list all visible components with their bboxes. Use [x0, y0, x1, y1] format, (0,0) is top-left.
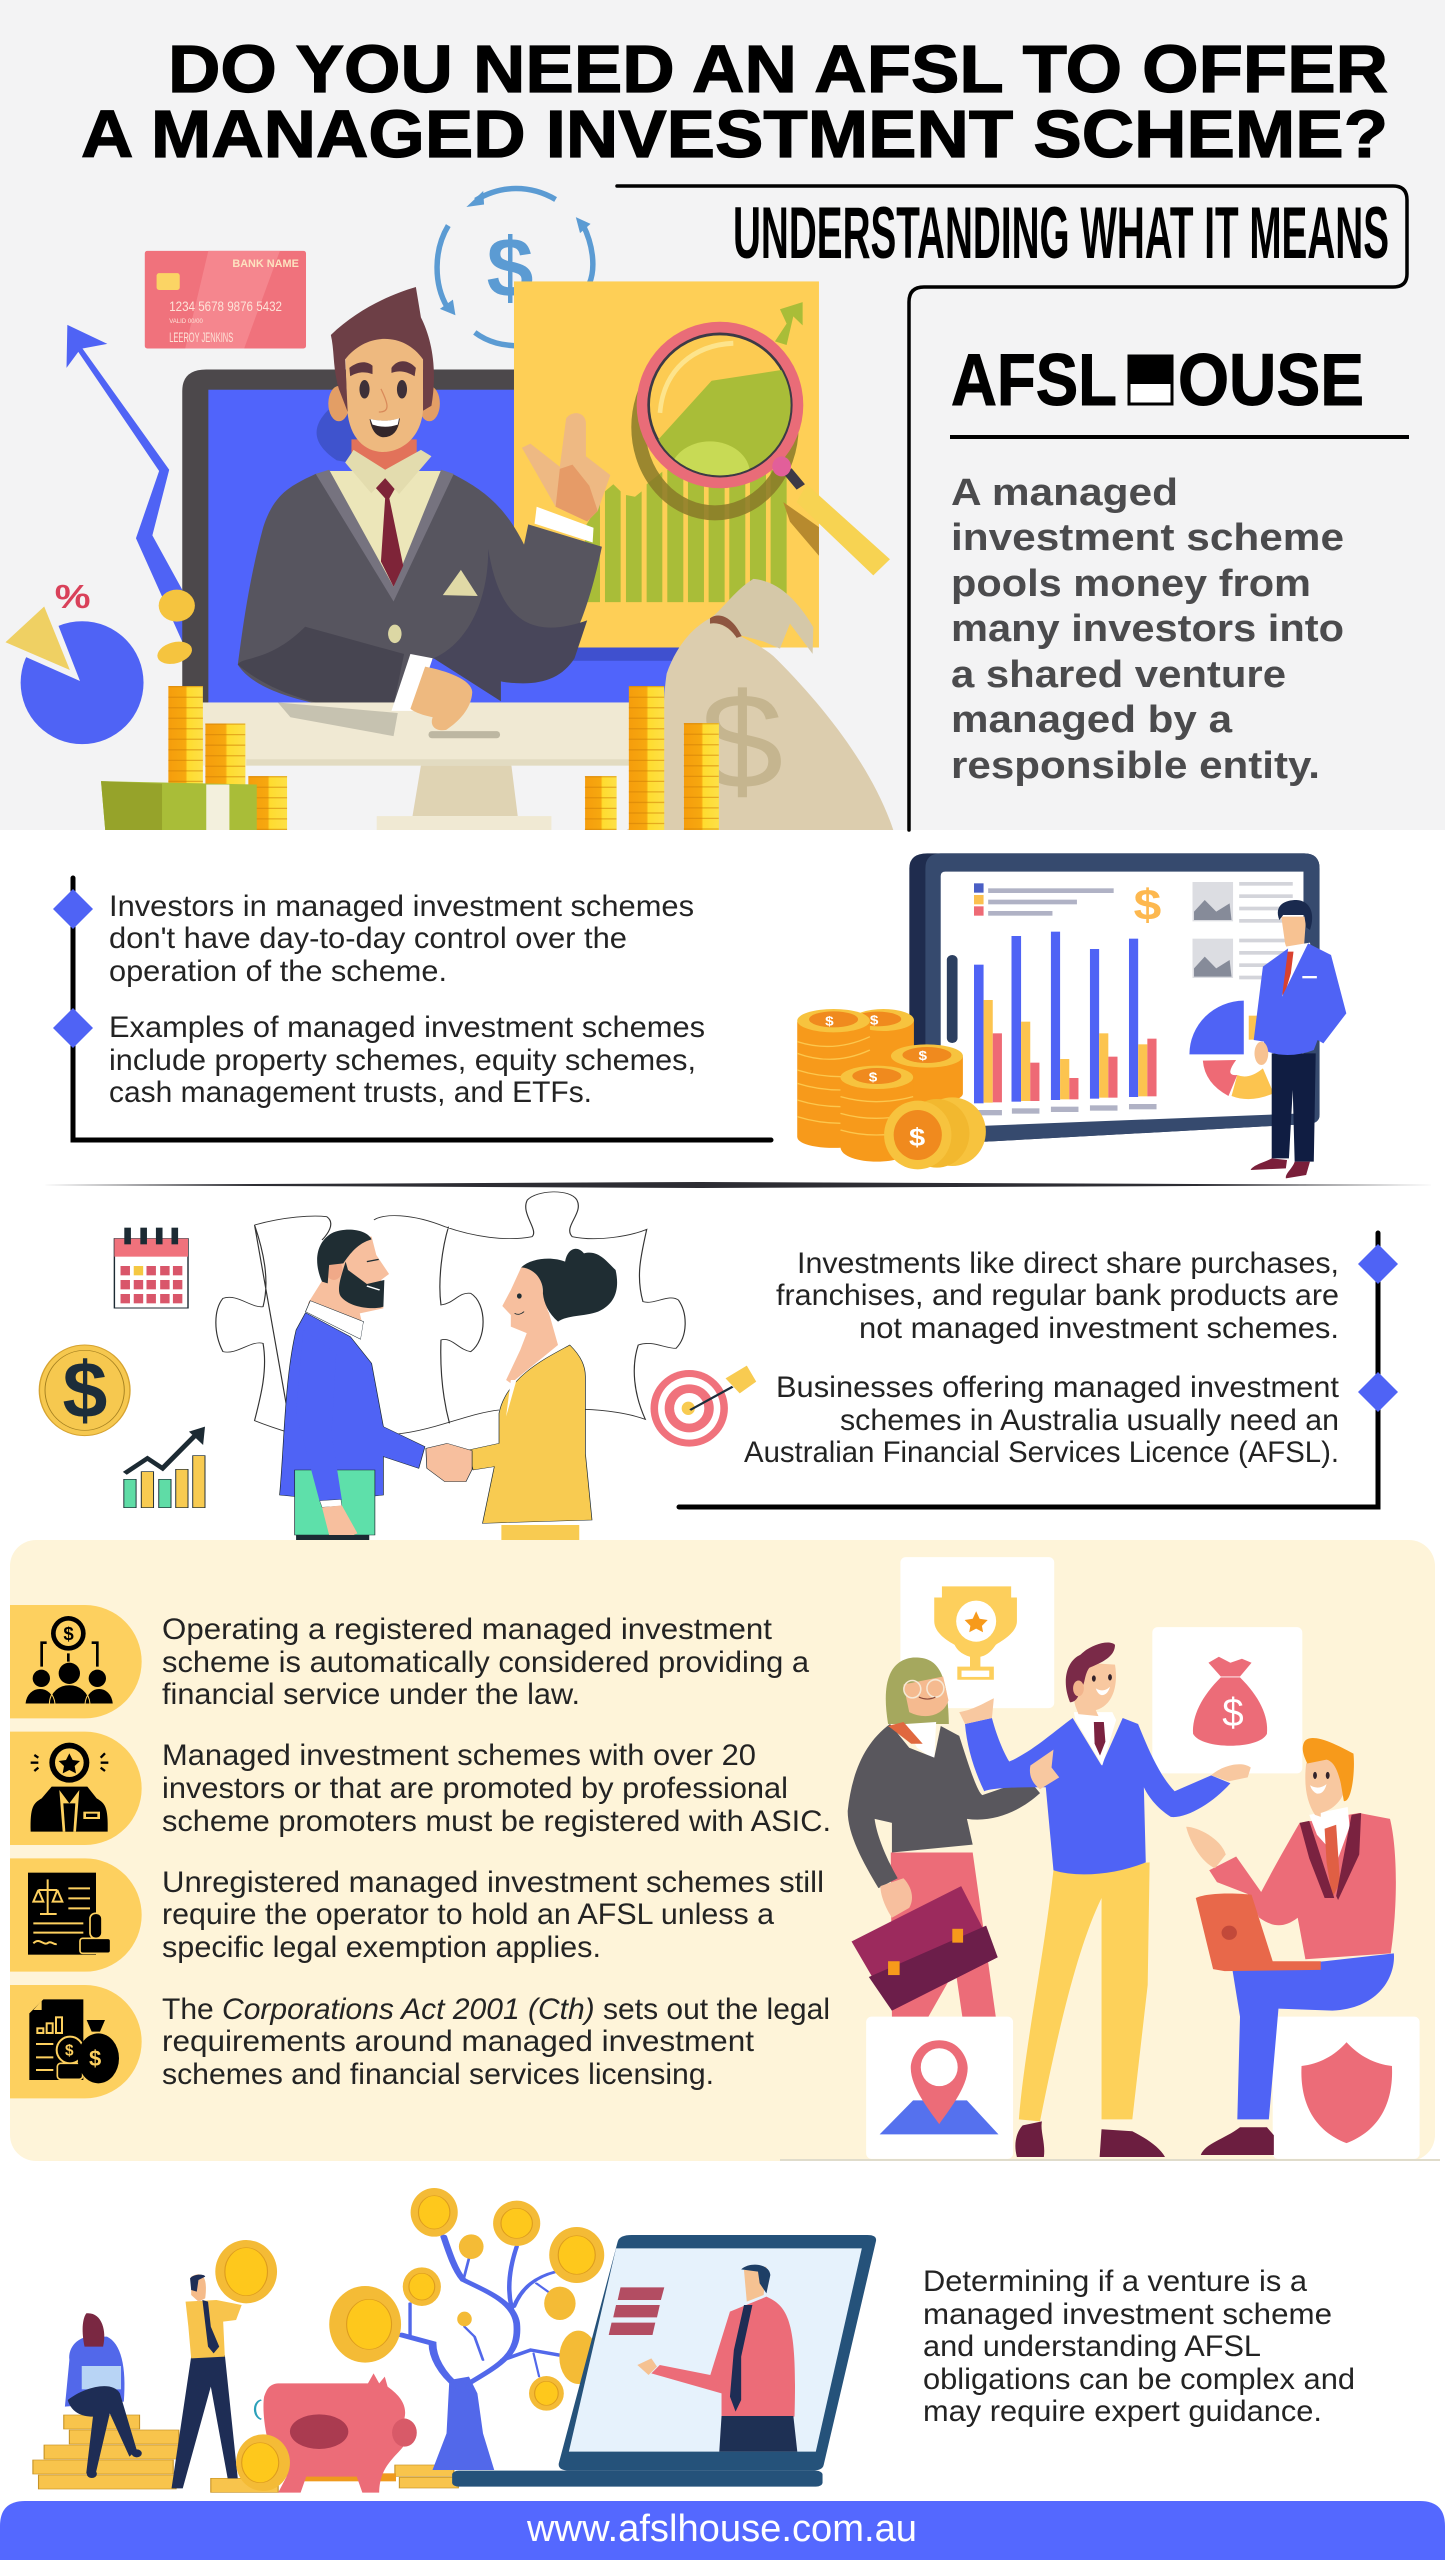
text: not MIS: not managed investment schemes.	[859, 1312, 1339, 1345]
monitor	[182, 370, 716, 717]
divider	[42, 1182, 1435, 1188]
coin stacks	[797, 1009, 986, 1169]
coin stacks: $	[870, 1013, 878, 1028]
coin stacks: $	[919, 1049, 927, 1064]
icon: bullet diamond	[53, 889, 93, 929]
text: investors	[109, 890, 694, 988]
text: examples: include property schemes, equity schemes,	[109, 1044, 696, 1077]
gold stack	[33, 2415, 458, 2492]
text: examples	[109, 1011, 705, 1109]
text: registration: scheme promoters must be registered with ASIC.	[162, 1805, 831, 1838]
intro paragraph: responsible entity.	[951, 745, 1320, 787]
text: unregistered: specific legal exemption applies.	[162, 1931, 601, 1964]
panel bottom line	[780, 2159, 1440, 2161]
tablet	[909, 853, 1320, 1142]
text: operating: financial service under the law.	[162, 1678, 580, 1711]
icon: credit card: BANK NAME	[232, 258, 299, 270]
icon: credit card: VALID 00/00	[169, 318, 203, 325]
intro paragraph: pools money from	[951, 563, 1311, 605]
coin stacks: $	[909, 1122, 925, 1151]
icon: bullet diamond	[1358, 1372, 1398, 1412]
card: money bag: $	[1222, 1691, 1244, 1735]
illustration: handshake with puzzle	[39, 1192, 756, 1541]
icon: pie chart	[5, 579, 144, 744]
illustration: dashboard tablet, coins and businessman	[797, 853, 1346, 1178]
icon: dollar cycle arrows: $	[487, 220, 533, 314]
text: corporations act	[162, 1993, 830, 2091]
text: AFSL needed: Businesses offering managed investment	[776, 1371, 1340, 1404]
icon group: licensing badges	[10, 1605, 142, 2098]
hero illustration: presenter at monitor	[5, 189, 716, 744]
legend	[974, 883, 1114, 916]
intro paragraph: A managed	[951, 472, 1178, 514]
text: registration: Managed investment schemes with over 20	[162, 1739, 756, 1772]
footer url: www.afslhouse.com.au	[526, 2508, 917, 2550]
icon: bullet diamond	[53, 1008, 93, 1048]
piggy bank	[236, 2373, 417, 2493]
text: investors: operation of the scheme.	[109, 955, 447, 988]
chart panel with magnifier	[514, 281, 890, 647]
icon: pie chart: %	[55, 579, 91, 616]
raised hand and cuff	[522, 413, 610, 543]
text: not MIS: Investments like direct share purchases,	[797, 1247, 1339, 1280]
woman	[468, 1249, 617, 1541]
icon: calendar	[114, 1228, 188, 1308]
text: operating	[162, 1613, 809, 1711]
icon: dollar coin	[39, 1345, 130, 1436]
desk	[202, 702, 682, 830]
text: not MIS	[776, 1247, 1339, 1345]
panel: licensing section	[10, 1540, 1435, 2161]
bar chart	[974, 932, 1157, 1115]
text: registration: investors or that are promoted by professional	[162, 1772, 788, 1805]
text: unregistered: require the operator to hold an AFSL unless a	[162, 1898, 774, 1931]
illustration: money tree and online adviser	[33, 2188, 876, 2493]
businessman	[1251, 900, 1346, 1178]
text: AFSL needed: Australian Financial Services Licence (AFSL).	[744, 1436, 1339, 1469]
suit	[238, 450, 602, 715]
intro paragraph: a shared venture	[951, 654, 1286, 696]
text: operating: Operating a registered managed investment	[162, 1613, 773, 1646]
background: white lower sections	[0, 830, 1445, 2560]
card: trophy	[900, 1557, 1054, 1708]
panel: business text	[679, 1233, 1398, 1507]
footer bar	[0, 2501, 1445, 2560]
icon: target with arrow	[651, 1366, 756, 1447]
text: not MIS: franchises, and regular bank products are	[776, 1279, 1339, 1312]
text: unregistered: Unregistered managed investment schemes still	[162, 1866, 824, 1899]
illustration: team of three with icon cards	[848, 1557, 1420, 2159]
man in pink jacket with laptop	[1186, 1738, 1396, 2155]
icon: dollar: $	[1134, 881, 1161, 929]
panel: investors bullets	[53, 878, 771, 1140]
icon: dollar cycle arrows	[437, 189, 593, 346]
standing man with coin	[172, 2240, 277, 2488]
title	[81, 32, 1388, 172]
card: map pin	[866, 2017, 1013, 2159]
woman with briefcase	[848, 1658, 1040, 2017]
text: AFSL needed: schemes in Australia usually need an	[840, 1404, 1339, 1437]
card: shield	[1273, 2017, 1420, 2159]
text: operating: scheme is automatically considered providing a	[162, 1646, 809, 1679]
text: closing note: may require expert guidance.	[923, 2395, 1322, 2428]
icon: bullet diamond	[1358, 1244, 1398, 1284]
text: examples: cash management trusts, and ETFs.	[109, 1076, 592, 1109]
neck shadow and ears	[328, 386, 440, 475]
puzzle outline	[216, 1192, 685, 1434]
text: closing note: managed investment scheme	[923, 2298, 1332, 2331]
text: examples: Examples of managed investment schemes	[109, 1011, 705, 1044]
falling coins	[155, 590, 195, 668]
coin stacks: $	[825, 1015, 834, 1029]
text: registration	[162, 1739, 831, 1838]
seated woman	[65, 2313, 142, 2478]
intro paragraph: managed by a	[951, 699, 1233, 741]
subtitle box frame	[617, 186, 1407, 830]
icon: credit card	[145, 251, 306, 348]
text: investors: don't have day-to-day control over the	[109, 922, 627, 955]
thumbnails	[1192, 882, 1293, 979]
text: corporations act: The Corporations Act 2001 (Cth) sets out the legal	[162, 1993, 830, 2026]
bar chart	[585, 470, 787, 602]
badge: report and money: $	[89, 2046, 101, 2071]
text: corporations act: requirements around managed investment	[162, 2025, 755, 2058]
coin stacks and banknotes	[101, 686, 719, 830]
logo: AFSL House: AFSL	[951, 340, 1117, 421]
badge: investor group: $	[63, 1623, 74, 1644]
icon: growth chart	[124, 1427, 205, 1508]
logo: AFSL House: OUSE	[1178, 340, 1364, 421]
lower hand and cuff	[391, 654, 472, 730]
handshake	[426, 1443, 472, 1482]
icon: dollar coin: $	[62, 1345, 107, 1435]
text block: licensing points	[162, 1613, 831, 2091]
text: closing note: obligations can be complex and	[923, 2363, 1355, 2396]
icon: rising arrow	[67, 325, 185, 644]
frame line	[679, 1233, 1378, 1507]
title: A MANAGED INVESTMENT SCHEME?	[81, 97, 1388, 172]
badge: investor group	[10, 1605, 142, 1718]
text: AFSL needed	[744, 1371, 1340, 1469]
coin stacks: $	[869, 1070, 877, 1085]
text: unregistered	[162, 1866, 824, 1964]
icon: credit card: LEEROY JENKINS	[169, 330, 233, 345]
frame line	[73, 878, 771, 1140]
badge: report and money: $	[65, 2043, 74, 2060]
head	[331, 287, 434, 452]
magnifier	[637, 302, 890, 575]
logo rule	[950, 435, 1409, 439]
intro paragraph	[951, 472, 1344, 787]
text: investors: Investors in managed investment schemes	[109, 890, 694, 923]
badge: report and money	[10, 1985, 142, 2098]
presenter	[155, 287, 682, 830]
intro paragraph: many investors into	[951, 608, 1344, 650]
icon: credit card: 1234 5678 9876 5432	[169, 299, 282, 314]
logo: AFSL House	[951, 340, 1364, 421]
title: DO YOU NEED AN AFSL TO OFFER	[168, 32, 1388, 107]
man	[280, 1230, 425, 1541]
tree	[402, 2237, 559, 2470]
intro paragraph: investment scheme	[951, 517, 1344, 559]
badge: promoter	[10, 1732, 142, 1845]
money bag: $	[700, 665, 783, 817]
donut chart	[1189, 1001, 1274, 1099]
money bag	[627, 579, 893, 830]
card: money bag	[1152, 1627, 1302, 1773]
text: closing note: Determining if a venture is a	[923, 2265, 1307, 2298]
text: corporations act: schemes and financial services licensing.	[162, 2058, 714, 2091]
badge: legal document	[10, 1858, 142, 1972]
man in blue sweater	[959, 1643, 1251, 2157]
coins on tree	[329, 2188, 604, 2411]
laptop with adviser	[452, 2235, 876, 2487]
background: top section	[0, 0, 1445, 830]
text: closing note: and understanding AFSL	[923, 2330, 1261, 2363]
text: closing note	[923, 2265, 1355, 2428]
